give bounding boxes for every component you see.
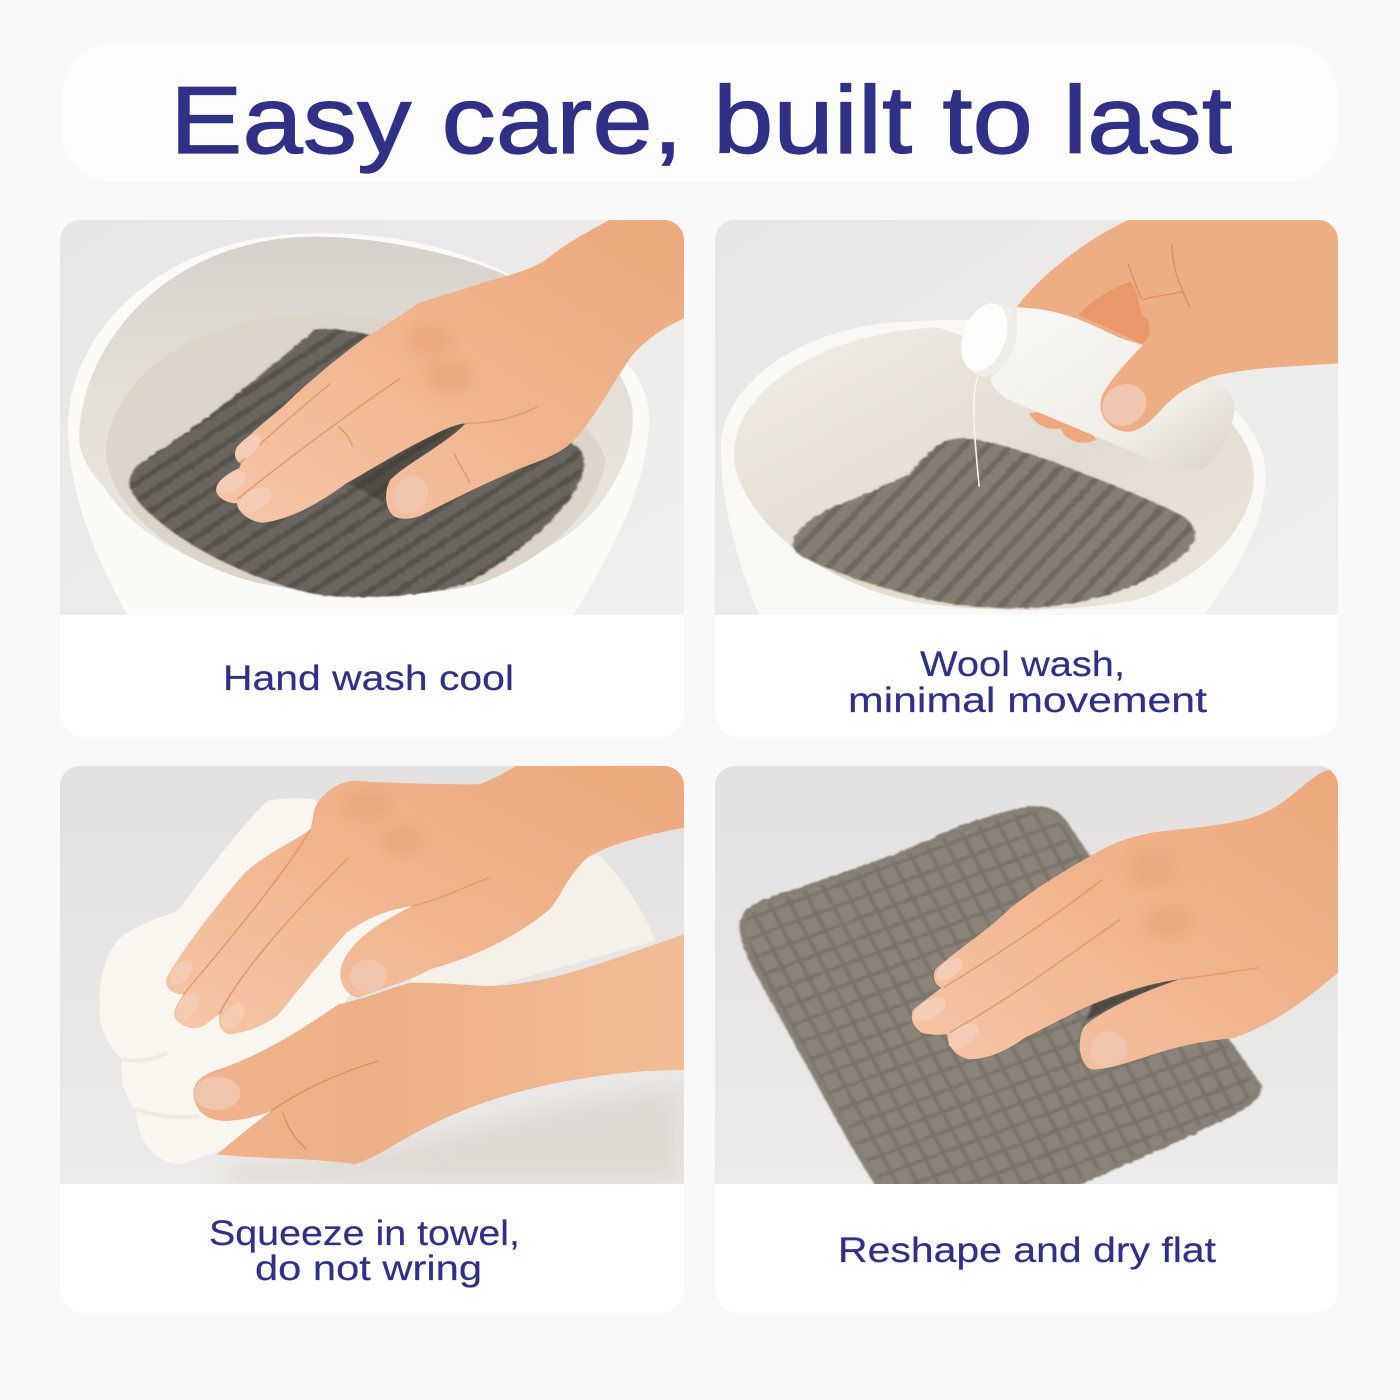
photo: hands pressing towel	[60, 766, 684, 1184]
caption: Hand wash cool	[223, 659, 514, 698]
photo: hand pressing cloth in bowl	[60, 220, 684, 615]
caption	[848, 645, 1207, 720]
panel: hand wash cool	[60, 220, 684, 737]
caption	[209, 1214, 520, 1288]
caption: Squeeze in towel,	[209, 1214, 520, 1253]
photo: hand reshaping cloth	[715, 766, 1338, 1189]
panel: squeeze in towel	[60, 766, 684, 1313]
panel: reshape and dry flat	[715, 766, 1338, 1313]
panel: wool wash	[715, 220, 1338, 737]
caption: Reshape and dry flat	[838, 1231, 1216, 1270]
infographic: care instructions	[60, 82, 1338, 1288]
caption: do not wring	[255, 1249, 482, 1288]
title banner: Easy care, built to last	[170, 67, 1232, 174]
caption: Wool wash,	[920, 645, 1125, 684]
caption: minimal movement	[848, 681, 1207, 720]
photo: pouring wool wash into bowl	[715, 220, 1338, 615]
title banner	[62, 44, 1338, 182]
